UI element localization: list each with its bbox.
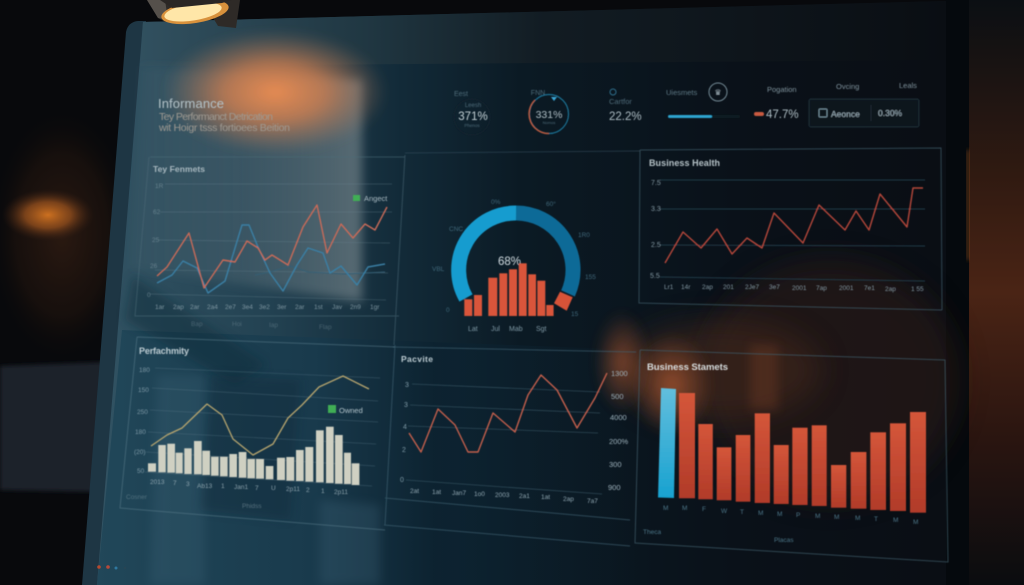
KPI: progress bar: Uiesmets: [666, 88, 698, 97]
panel: central gauge: [405, 151, 640, 333]
bar labels: T: [874, 516, 878, 523]
y axis labels: 2.5: [651, 242, 661, 249]
x axis labels: 7e1: [864, 285, 875, 292]
gauge scale labels: 0: [446, 307, 450, 314]
x axis labels: Jan1: [234, 484, 248, 491]
bars: [148, 427, 359, 485]
right axis labels: 300: [609, 460, 622, 469]
KPI: summary box: 0.30%: [878, 108, 903, 118]
gauge bar labels: Mab: [509, 326, 523, 333]
gauge bar labels: Jul: [491, 326, 500, 333]
x axis labels: 1gr: [370, 304, 380, 311]
KPI: position value: [754, 85, 799, 121]
x axis labels: 1: [321, 488, 325, 495]
subtitle: Tey Performanct Detrication: [159, 111, 273, 123]
KPI: progress bar: ♛: [714, 88, 722, 97]
left axis labels: [400, 382, 409, 484]
x axis labels: 3e7: [769, 284, 780, 291]
y axis labels: 62: [153, 209, 161, 216]
y axis labels: 180: [135, 429, 146, 436]
bar labels: Theca: [643, 529, 661, 536]
legend: [353, 194, 388, 203]
x axis labels: 7ap: [816, 285, 827, 292]
panel: business health: [639, 148, 942, 310]
bar labels: M: [682, 505, 687, 512]
bar labels: M: [893, 517, 898, 524]
grid lines: [406, 384, 602, 494]
KPI: position value: 47.7%: [766, 109, 799, 121]
y axis labels: [650, 180, 661, 280]
right axis labels: 200%: [609, 437, 629, 446]
x axis labels: 2e7: [225, 304, 236, 311]
y axis labels: 250: [137, 409, 148, 416]
x axis labels: 2ap: [702, 284, 713, 291]
x axis labels: 1 55: [911, 286, 924, 293]
x axis labels: 2001: [792, 285, 807, 292]
y axis labels: 26: [150, 263, 158, 270]
panel: activity line chart: [384, 345, 636, 546]
right axis labels: [608, 369, 629, 492]
x axis labels: Jan7: [452, 490, 466, 497]
KPI: percentage: Cartfor: [609, 97, 632, 106]
subtitle second line: wit Hoigr tsss fortioees Beition: [158, 122, 290, 134]
bar labels: M: [815, 513, 820, 520]
x axis labels: 2ap: [885, 286, 896, 293]
blue series: [157, 225, 385, 293]
x axis labels: 2ar: [295, 304, 305, 311]
red line: [409, 373, 607, 452]
x axis labels: Jav: [332, 304, 343, 311]
bar labels: M: [834, 514, 839, 521]
left axis labels: 0: [400, 477, 404, 484]
y axis labels: 180: [139, 367, 150, 374]
panel: key formats line chart: [135, 155, 405, 345]
grid lines: [660, 180, 925, 281]
KPI: gauge ring: FNN: [531, 90, 545, 97]
y axis labels: [134, 367, 150, 475]
y axis labels: 25: [152, 237, 160, 244]
gauge scale labels: 1R0: [578, 232, 590, 239]
x axis labels: 7: [173, 480, 177, 487]
right axis labels: 4000: [610, 413, 627, 422]
heading: Pacvite: [401, 354, 433, 364]
bar labels: F: [702, 506, 706, 513]
legend: Angect: [364, 194, 388, 203]
bar labels: T: [740, 509, 744, 516]
gauge marker: [554, 292, 573, 311]
heading: Business Health: [649, 158, 720, 168]
gauge bar labels: [468, 326, 547, 333]
gauge scale labels: 60°: [546, 200, 556, 208]
icon: status dots: [97, 565, 126, 570]
left axis labels: 2: [402, 447, 406, 454]
x axis labels: 14r: [681, 284, 691, 291]
bar labels: M: [913, 519, 918, 526]
y axis labels: 1R: [155, 183, 164, 190]
x axis labels: 1at: [432, 489, 441, 496]
bar labels: M: [777, 511, 782, 518]
KPI: summary box: [809, 99, 919, 127]
KPI: gauge ring: [529, 90, 568, 134]
x axis labels: 3er: [277, 304, 287, 311]
column label: Leals: Leals: [899, 81, 917, 90]
heading: Tey Fenmets: [153, 164, 205, 174]
y axis labels: [147, 183, 164, 299]
x axis labels: 3e2: [259, 304, 270, 311]
x axis labels: Cosner: [126, 494, 148, 501]
red series: [157, 205, 387, 288]
gauge arc blue: [459, 213, 516, 298]
x axis labels: Bap: [191, 321, 203, 328]
x axis labels: 2p11: [334, 489, 348, 496]
x axis labels: 1st: [314, 304, 323, 311]
gauge bars: [464, 263, 554, 316]
KPI: first ring: Eest: [454, 91, 468, 98]
KPI: percentage: 22.2%: [609, 111, 642, 123]
heading: Perfachmity: [139, 346, 189, 356]
blue bar: [658, 388, 676, 498]
x axis labels: 1at: [541, 494, 550, 501]
y axis labels: (20): [134, 449, 146, 456]
y axis labels: 50: [137, 468, 145, 475]
line series: [151, 376, 369, 455]
gauge scale labels: 15: [571, 311, 579, 318]
x axis labels: 2ap: [563, 496, 574, 503]
x axis labels: 201: [723, 284, 734, 291]
KPI: gauge ring: Nomos: [543, 120, 555, 125]
x axis labels: 2a1: [519, 493, 530, 500]
x axis labels: 3e4: [242, 304, 253, 311]
right axis labels: 1300: [611, 369, 628, 378]
x axis labels: 2ar: [190, 304, 200, 311]
KPI: gauge ring: 331%: [536, 109, 562, 121]
legend: Owned: [339, 406, 363, 415]
icon: desk lamp: [147, 0, 240, 28]
bar labels: M: [855, 515, 860, 522]
bar labels: M: [663, 505, 668, 512]
x axis labels: [155, 304, 380, 331]
x axis labels: Lr1: [664, 284, 674, 291]
x axis labels: 2001: [839, 285, 854, 292]
x axis labels: [126, 479, 348, 510]
gauge scale labels: VBL: [432, 266, 445, 273]
x axis labels: Iap: [269, 322, 278, 329]
grid lines: [150, 184, 392, 300]
x axis labels: Ab13: [197, 483, 213, 490]
KPI: first ring: Leesh: [465, 103, 481, 109]
x axis labels: 1o0: [474, 491, 485, 498]
y axis labels: 3.3: [651, 206, 661, 213]
x axis labels: 2013: [150, 479, 165, 486]
right axis labels: 900: [608, 483, 621, 492]
x axis labels: [664, 284, 924, 293]
grid lines: [145, 368, 380, 486]
gauge scale labels: CNC: [449, 226, 463, 233]
bar labels: M: [758, 510, 763, 517]
KPI: summary box: Aeonce: [831, 109, 860, 119]
x axis labels: 7: [255, 485, 259, 492]
left axis labels: 4: [403, 424, 407, 431]
column label: Ovcing: Ovcing: [836, 82, 859, 91]
y axis labels: 5.5: [650, 273, 660, 280]
gauge scale labels: 155: [585, 274, 596, 281]
x axis labels: [410, 488, 598, 505]
legend: [328, 405, 363, 415]
x axis labels: 2a4: [207, 304, 218, 311]
x axis labels: 2ap: [173, 304, 184, 311]
x axis labels: 1ar: [155, 304, 165, 311]
KPI: first ring: Phenos: [464, 123, 480, 128]
x axis labels: Phidss: [242, 503, 262, 510]
panel: productivity combo chart: [120, 337, 395, 530]
x axis labels: 3: [186, 481, 190, 488]
red bars: [679, 393, 926, 513]
red line: [665, 188, 923, 263]
light reflections: [125, 30, 778, 585]
y axis labels: 150: [138, 387, 149, 394]
y axis labels: 7.5: [651, 180, 661, 187]
KPI: first ring: 371%: [458, 111, 488, 123]
x axis labels: 2at: [410, 488, 419, 495]
bar labels: [643, 505, 918, 544]
left axis labels: 3: [405, 382, 409, 389]
x axis labels: 7a7: [587, 498, 598, 505]
gauge bar labels: Lat: [468, 326, 478, 333]
x axis labels: 2Je7: [745, 284, 759, 291]
KPI strip: [454, 81, 919, 135]
gauge scale labels: 0%: [491, 199, 501, 206]
x axis labels: U: [271, 485, 276, 492]
x axis labels: 2003: [495, 492, 510, 499]
gauge scale labels: [432, 199, 596, 318]
faint series: [255, 266, 385, 275]
header block: [158, 96, 290, 134]
left axis labels: 3: [404, 402, 408, 409]
panel: business statements bar chart: [635, 350, 948, 562]
bar labels: P: [796, 512, 800, 519]
gauge bar labels: Sgt: [536, 326, 547, 333]
x axis labels: Hoi: [232, 321, 242, 328]
x axis labels: 1: [221, 483, 225, 490]
gauge arc dark blue: [516, 213, 573, 293]
y axis labels: 0: [147, 292, 151, 299]
heading: Business Stamets: [647, 362, 728, 373]
KPI: position value: Pogation: [767, 85, 797, 94]
x axis labels: Flap: [319, 324, 332, 331]
KPI: percentage: [609, 89, 642, 123]
x axis labels: 2p11: [286, 486, 300, 493]
bar labels: Placas: [774, 537, 794, 544]
right axis labels: 500: [611, 392, 624, 401]
bar labels: W: [721, 508, 728, 515]
gauge value: 68%: [498, 256, 521, 268]
KPI: first ring: [454, 91, 490, 135]
x axis labels: 2: [306, 487, 310, 494]
x axis labels: 2n9: [350, 304, 361, 311]
title: Informance: [158, 96, 224, 111]
KPI: progress bar: [666, 83, 740, 118]
